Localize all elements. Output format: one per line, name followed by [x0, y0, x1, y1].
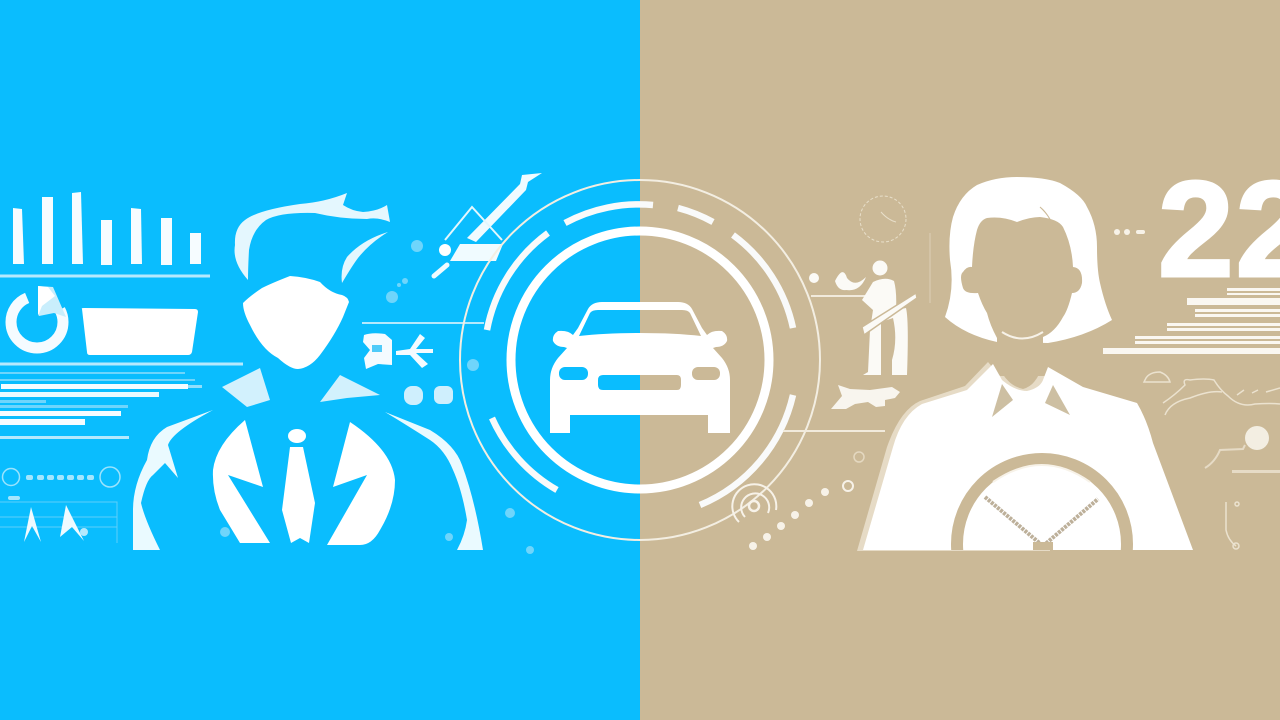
icon: handshake glyph — [363, 333, 433, 369]
small route icon — [1226, 502, 1239, 549]
text lines block — [0, 362, 243, 439]
node path icon — [1205, 426, 1280, 473]
outer ring — [460, 180, 820, 540]
progress dots — [2, 467, 120, 500]
woman head — [961, 217, 1082, 389]
woman hair — [945, 177, 1112, 343]
man jacket — [213, 420, 395, 545]
woman collar — [992, 384, 1070, 417]
car body — [550, 302, 730, 433]
summary card — [82, 308, 198, 355]
icon: small rounded tags — [404, 386, 453, 405]
connector line — [362, 322, 484, 324]
icon: signal arcs — [732, 484, 776, 522]
man hair — [235, 193, 390, 283]
woman body shadow — [857, 362, 1050, 551]
line chart — [0, 502, 117, 543]
donut chart — [11, 286, 66, 348]
small dots before number — [1114, 229, 1145, 235]
connector lines right — [783, 233, 930, 432]
bar chart — [0, 192, 210, 278]
panel: blue left background — [0, 0, 640, 720]
floating dots left — [220, 240, 534, 554]
icon: running dog — [831, 385, 900, 409]
icon: person with tools — [809, 260, 917, 375]
woman torso — [863, 364, 1193, 550]
map route lines — [1144, 372, 1280, 415]
panel: tan right background — [640, 0, 1280, 720]
stepped lines chart — [1103, 288, 1280, 354]
woman smile — [1002, 332, 1043, 338]
icon: pen and triangle tool — [434, 173, 542, 276]
man shoulders — [133, 410, 483, 550]
man face — [243, 276, 349, 369]
car lights and grille — [559, 367, 720, 390]
inner ring — [511, 231, 769, 489]
steering wheel — [951, 453, 1133, 550]
man collar — [222, 368, 380, 407]
icon: car front — [550, 302, 730, 433]
dashed arcs — [487, 204, 793, 505]
woman figure — [857, 177, 1193, 551]
car windshield — [579, 310, 701, 336]
circular gauge — [460, 180, 820, 540]
woman hair highlight — [1040, 207, 1055, 232]
man tie — [282, 429, 315, 543]
dotted trail — [749, 452, 864, 550]
icon: clock outline — [860, 196, 906, 242]
man figure — [133, 193, 483, 550]
